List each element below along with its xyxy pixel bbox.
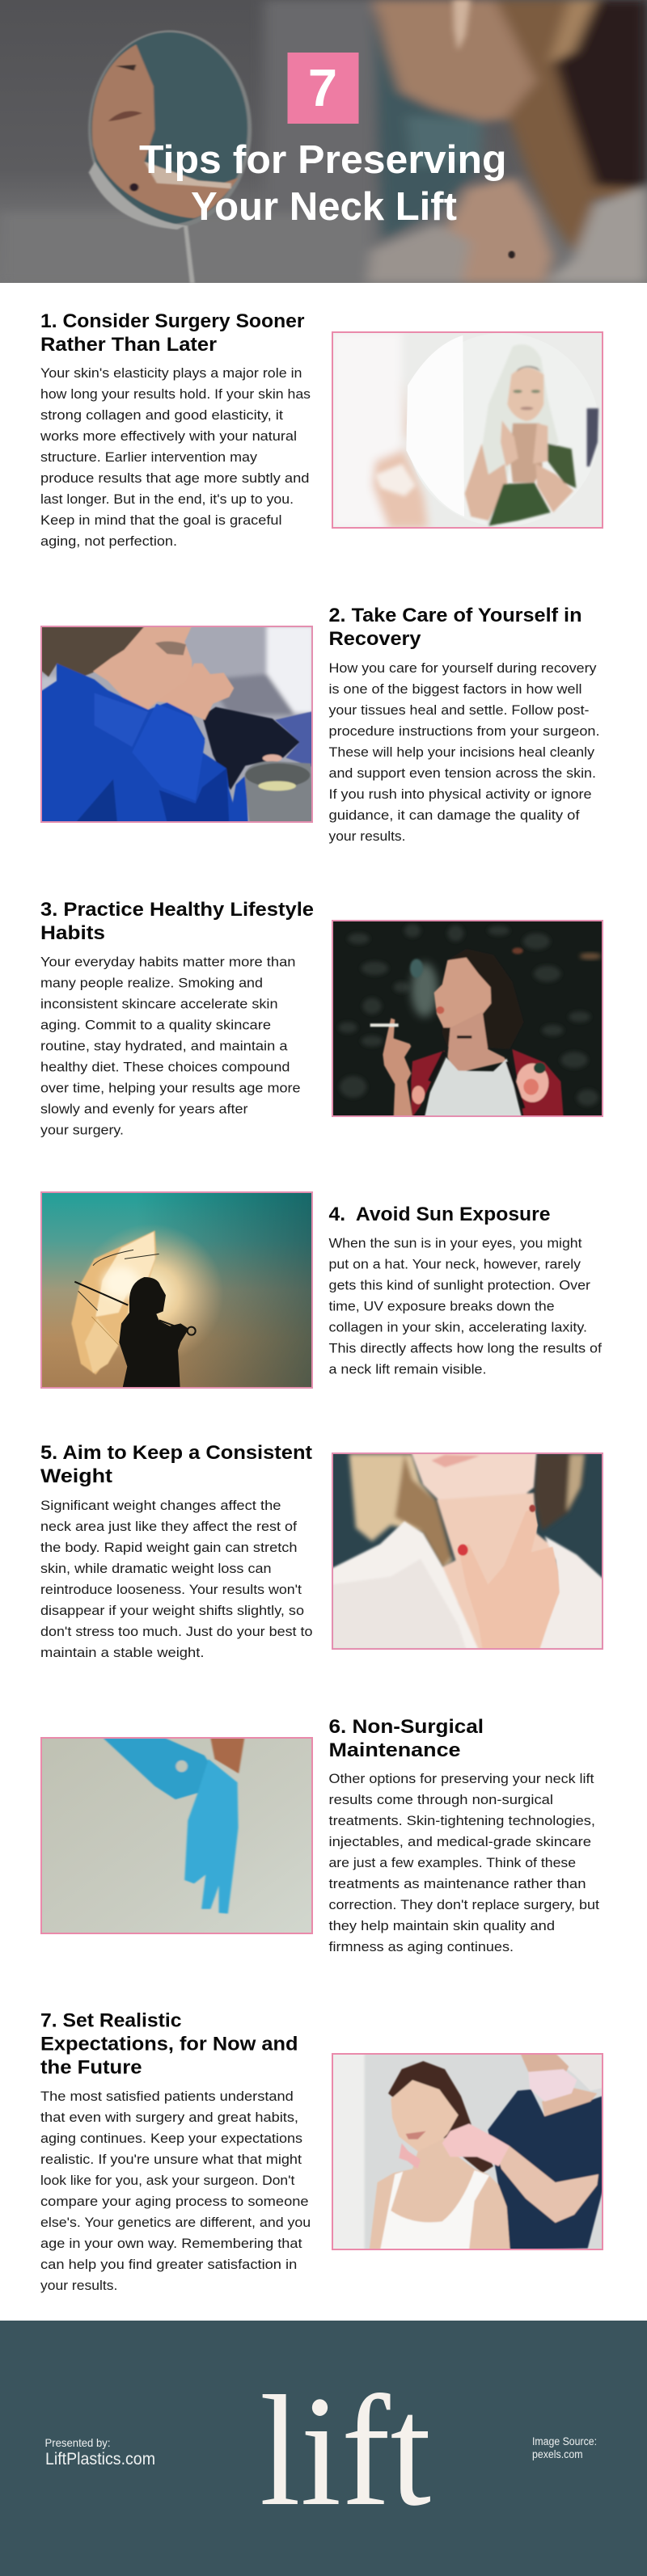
body text 3: your surgery. [40, 1124, 124, 1138]
body text 5: don't stress too much. Just do your best to [40, 1625, 312, 1639]
body text 1: Your skin's elasticity plays a major role in [40, 366, 302, 381]
section 2: Take Care of Yourself in Recovery [40, 605, 600, 844]
body text 5: neck area just like they affect the rest of [40, 1520, 297, 1534]
body text 5: the body. Rapid weight gain can stretch [40, 1541, 297, 1555]
body text 5 [40, 1499, 312, 1660]
heading 3 [40, 899, 314, 944]
body text 3: many people realize. Smoking and [40, 976, 263, 991]
body text 1: strong collagen and good elasticity, it [40, 408, 283, 423]
photo 2: woman in blue sweater with mug [40, 626, 314, 823]
body text 7: look like for you, ask your surgeon. Don't [40, 2173, 295, 2188]
badge: number 7: 7 [308, 58, 337, 117]
body text 7: compare your aging process to someone [40, 2194, 309, 2209]
body text 5: disappear if your weight shifts slightly, so [40, 1604, 304, 1618]
body text 6: injectables, and medical-grade skincare [328, 1835, 591, 1849]
body text 3: inconsistent skincare accelerate skin [40, 997, 278, 1012]
body text 7 [40, 2089, 311, 2293]
body text 6 [328, 1772, 599, 1954]
body text 3: aging. Commit to a quality skincare [40, 1018, 271, 1033]
body text 5: Significant weight changes affect the [40, 1499, 281, 1513]
image source [532, 2435, 597, 2460]
body text 4: a neck lift remain visible. [328, 1363, 487, 1377]
logo: lift: lift [260, 2363, 431, 2539]
body text 2: is one of the biggest factors in how well [328, 682, 582, 697]
header banner [0, 0, 647, 283]
heading 7: Expectations, for Now and [40, 2034, 298, 2055]
heading 6: Maintenance [328, 1739, 461, 1761]
body text 2: procedure instructions from your surgeon. [328, 724, 600, 739]
heading 6 [328, 1716, 484, 1761]
heading 2 [328, 605, 582, 650]
body text 6: results come through non-surgical [328, 1793, 553, 1807]
body text 5: reintroduce looseness. Your results won't [40, 1583, 302, 1597]
body text 7: your results. [40, 2279, 117, 2293]
title: Your Neck Lift [191, 185, 457, 229]
heading 3: Habits [40, 922, 105, 944]
body text 2: guidance, it can damage the quality of [328, 808, 580, 823]
body text 6: they help maintain skin quality and [328, 1919, 555, 1933]
body text 1: Keep in mind that the goal is graceful [40, 513, 281, 528]
heading 1 [40, 310, 304, 356]
heading 1: 1. Consider Surgery Sooner [40, 310, 304, 332]
photo 5: woman touching neck in white shirt [332, 1452, 603, 1650]
body text 7: else's. Your genetics are different, and you [40, 2216, 311, 2230]
body text 3: routine, stay hydrated, and maintain a [40, 1039, 288, 1054]
body text 4: collagen in your skin, accelerating laxity. [328, 1321, 587, 1335]
body text 7: that even with surgery and great habits, [40, 2110, 298, 2125]
heading 7: the Future [40, 2056, 142, 2079]
photo 3: woman smoking against dark foliage [332, 920, 603, 1117]
body text 2: your tissues heal and settle. Follow post- [328, 703, 589, 718]
image source: Image Source: [532, 2435, 597, 2447]
header photo: woman checking neck in mirror [0, 0, 647, 283]
body text 1: structure. Earlier intervention may [40, 450, 258, 465]
presented by [45, 2436, 155, 2468]
photo 1: woman in towel at round mirror [332, 331, 603, 529]
body text 7: age in your own way. Remembering that [40, 2237, 302, 2251]
section 5: Aim to Keep a Consistent Weight [40, 1442, 603, 1660]
heading 5: 5. Aim to Keep a Consistent [40, 1442, 312, 1464]
body text 2: These will help your incisions heal cleanly [328, 745, 595, 760]
body text 4: This directly affects how long the results of [328, 1342, 602, 1356]
photo 4: silhouette with umbrella at sunset [40, 1191, 313, 1389]
body text 1: aging, not perfection. [40, 534, 177, 549]
body text 6: firmness as aging continues. [328, 1940, 514, 1954]
badge: number 7 [288, 53, 359, 124]
heading 7: 7. Set Realistic [40, 2009, 181, 2032]
body text 6: correction. They don't replace surgery, but [328, 1898, 599, 1912]
body text 3: Your everyday habits matter more than [40, 955, 296, 970]
section 6: Non-Surgical Maintenance [40, 1716, 599, 1954]
body text 6: Other options for preserving your neck lift [328, 1772, 594, 1786]
presented by: LiftPlastics.com [45, 2450, 155, 2468]
body text 3 [40, 955, 301, 1138]
section 7: Set Realistic Expectations [40, 2009, 603, 2293]
body text 6: are just a few examples. Think of these [328, 1856, 576, 1870]
section 3: Practice Healthy Lifestyle Habits [40, 899, 603, 1138]
body text 2: your results. [328, 829, 406, 844]
body text 2 [328, 661, 600, 844]
heading 1: Rather Than Later [40, 334, 217, 356]
body text 7: The most satisfied patients understand [40, 2089, 294, 2104]
photo 7: surgeon examining woman's neck [332, 2053, 603, 2250]
body text 1: produce results that age more subtly and [40, 471, 309, 486]
heading 6: 6. Non-Surgical [328, 1716, 484, 1738]
section 1: Consider Surgery Sooner [40, 310, 603, 549]
body text 3: healthy diet. These choices compound [40, 1060, 290, 1075]
heading 2: Recovery [328, 628, 421, 650]
photo 6: blue medical glove being pulled on [40, 1737, 313, 1934]
body text 2: How you care for yourself during recovery [328, 661, 597, 676]
body text 4: time, UV exposure breaks down the [328, 1300, 555, 1314]
body text 1: how long your results hold. If your skin has [40, 387, 311, 402]
presented by: Presented by: [45, 2436, 110, 2449]
title: Tips for Preserving [139, 138, 506, 182]
body text 5: maintain a stable weight. [40, 1646, 204, 1660]
body text 4 [328, 1237, 602, 1377]
body text 4: gets this kind of sunlight protection. Over [328, 1279, 591, 1293]
body text 7: can help you find greater satisfaction in [40, 2258, 297, 2272]
heading 5 [40, 1442, 312, 1487]
heading 3: 3. Practice Healthy Lifestyle [40, 899, 314, 921]
body text 1: works more effectively with your natural [40, 429, 297, 444]
body text 1: last longer. But in the end, it's up to you. [40, 492, 294, 507]
body text 7: aging continues. Keep your expectations [40, 2131, 302, 2146]
body text 2: If you rush into physical activity or ignore [328, 787, 592, 802]
image source: pexels.com [532, 2448, 582, 2460]
heading 4: 4. Avoid Sun Exposure [328, 1204, 550, 1225]
section 4: Avoid Sun Exposure [40, 1191, 602, 1389]
body text 6: treatments as maintenance rather than [328, 1877, 586, 1891]
body text 6: treatments. Skin-tightening technologies, [328, 1814, 595, 1828]
title [139, 138, 506, 229]
heading 5: Weight [40, 1465, 112, 1487]
body text 7: realistic. If you're unsure what that might [40, 2152, 302, 2167]
heading 7 [40, 2009, 298, 2079]
body text 3: over time, helping your results age more [40, 1081, 301, 1096]
body text 4: put on a hat. Your neck, however, rarely [328, 1258, 581, 1272]
heading 2: 2. Take Care of Yourself in [328, 605, 582, 626]
footer [0, 2321, 647, 2576]
body text 1 [40, 366, 311, 549]
body text 3: slowly and evenly for years after [40, 1102, 248, 1117]
body text 5: skin, while dramatic weight loss can [40, 1562, 272, 1576]
body text 2: and support even tension across the skin. [328, 766, 596, 781]
body text 4: When the sun is in your eyes, you might [328, 1237, 582, 1251]
